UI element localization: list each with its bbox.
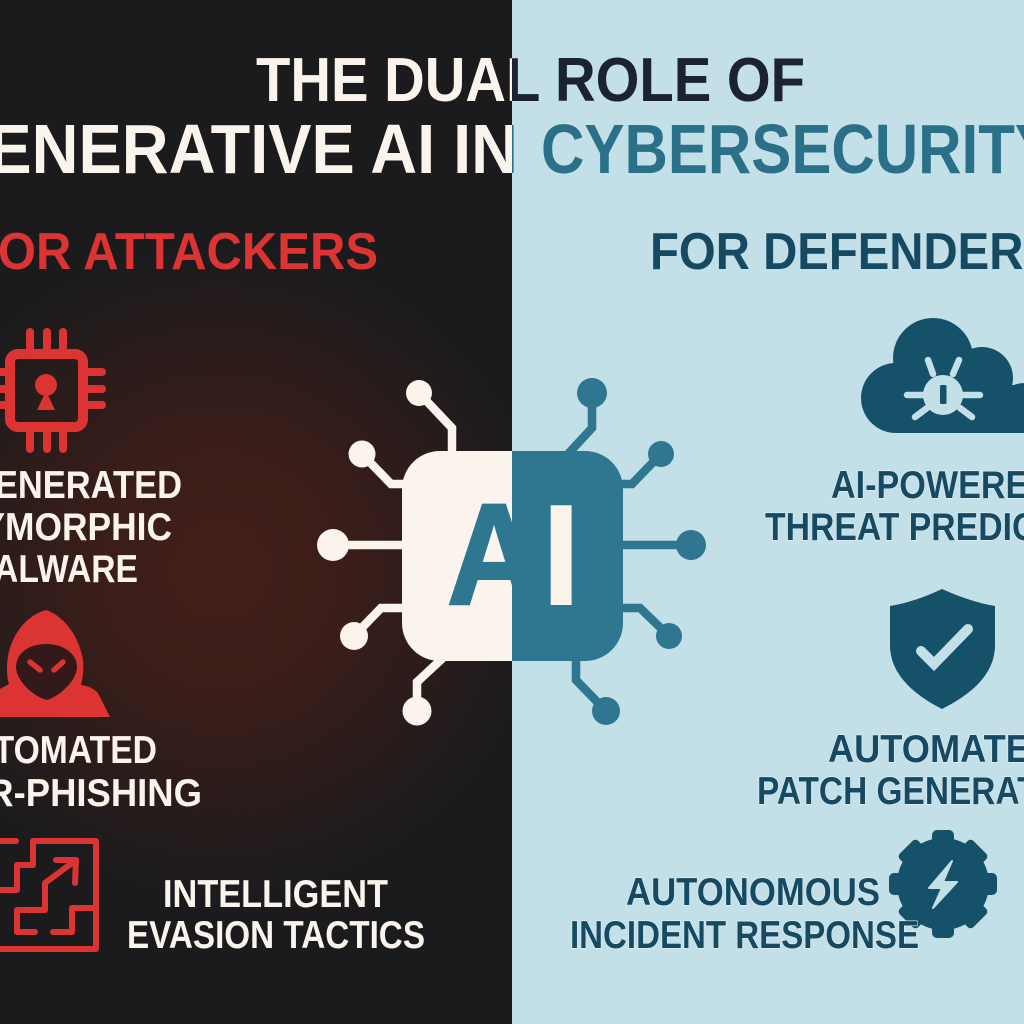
letter I: I (541, 474, 581, 636)
hub body: cream half (402, 451, 512, 661)
text: automated patch generation (757, 728, 1024, 813)
text: autonomous incident response (570, 871, 919, 957)
icon: cloud with bug (861, 318, 1024, 433)
icon: hooded hacker (0, 610, 110, 717)
connectors: attacker side (333, 393, 452, 711)
text: intelligent evasion tactics: EVASION TACTICS (127, 914, 425, 957)
icon: chip with keyhole (0, 328, 106, 453)
text: AI-generated polymorphic malware (0, 464, 182, 591)
hub body: teal half (512, 451, 623, 661)
text: intelligent evasion tactics (127, 873, 425, 957)
panel: attackers background (0, 0, 512, 1024)
central AI hub (317, 378, 706, 726)
letter A: A (447, 474, 541, 635)
nodes: attacker side (317, 380, 432, 726)
text: autonomous incident response: AUTONOMOUS (626, 871, 880, 914)
icon: maze with arrow (0, 841, 96, 949)
nodes: defender side (577, 378, 706, 725)
title (0, 46, 1024, 188)
icon: shield with check (890, 589, 995, 709)
connectors: defender side (568, 393, 691, 711)
text: intelligent evasion tactics: INTELLIGENT (163, 873, 388, 916)
text: autonomous incident response: INCIDENT RESPONSE (570, 914, 919, 957)
panel: defenders background (512, 0, 1024, 1024)
icon: gear with lightning bolt (889, 830, 997, 938)
text: AI-powered threat prediction (765, 464, 1024, 549)
title: THE DUAL ROLE OF (256, 46, 805, 115)
text: automated spear-phishing (0, 729, 202, 815)
